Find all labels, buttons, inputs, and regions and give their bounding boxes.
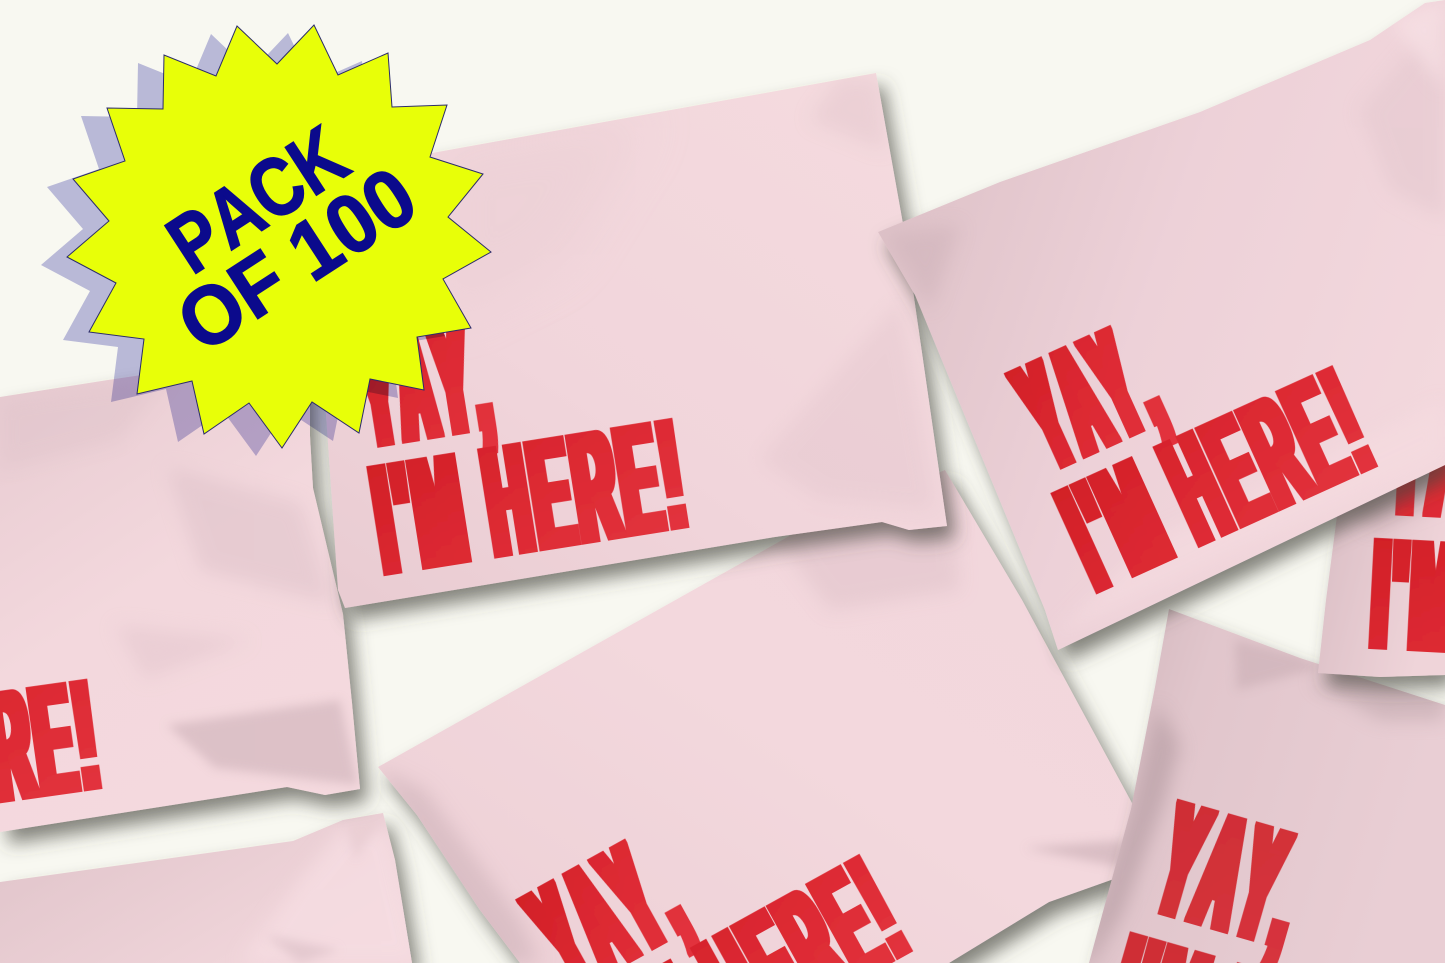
mailer: lower right xyxy=(1080,609,1445,963)
mailer text: YAY, I'M HERE!: YAY, xyxy=(995,289,1186,502)
mailer text: YAY, I'M HERE!: I'M HERE! xyxy=(1039,334,1396,622)
mailer text: YAY, I'M HERE!: I'M HERE! xyxy=(363,386,699,607)
mailer: bottom left xyxy=(0,813,420,963)
mailer text: YAY, I'M HERE!: YAY, xyxy=(348,288,504,480)
mailer: top right xyxy=(878,0,1445,650)
mailer: left xyxy=(0,350,360,862)
badge text: OF 100 xyxy=(162,150,433,370)
mailer text: YAY, I'M xyxy=(1368,465,1445,653)
mailer: top centre xyxy=(310,73,947,608)
badge shadow xyxy=(41,33,465,456)
mailer text: YAY, I'M xyxy=(1120,798,1298,963)
mailer text: YAY, I'M HERE! xyxy=(366,330,690,576)
starburst xyxy=(67,25,491,448)
badge text: PACK xyxy=(151,109,364,292)
mailer: lower centre xyxy=(378,470,1133,963)
badge: pack of 100 xyxy=(67,25,491,448)
mailer: small right xyxy=(1314,465,1445,702)
